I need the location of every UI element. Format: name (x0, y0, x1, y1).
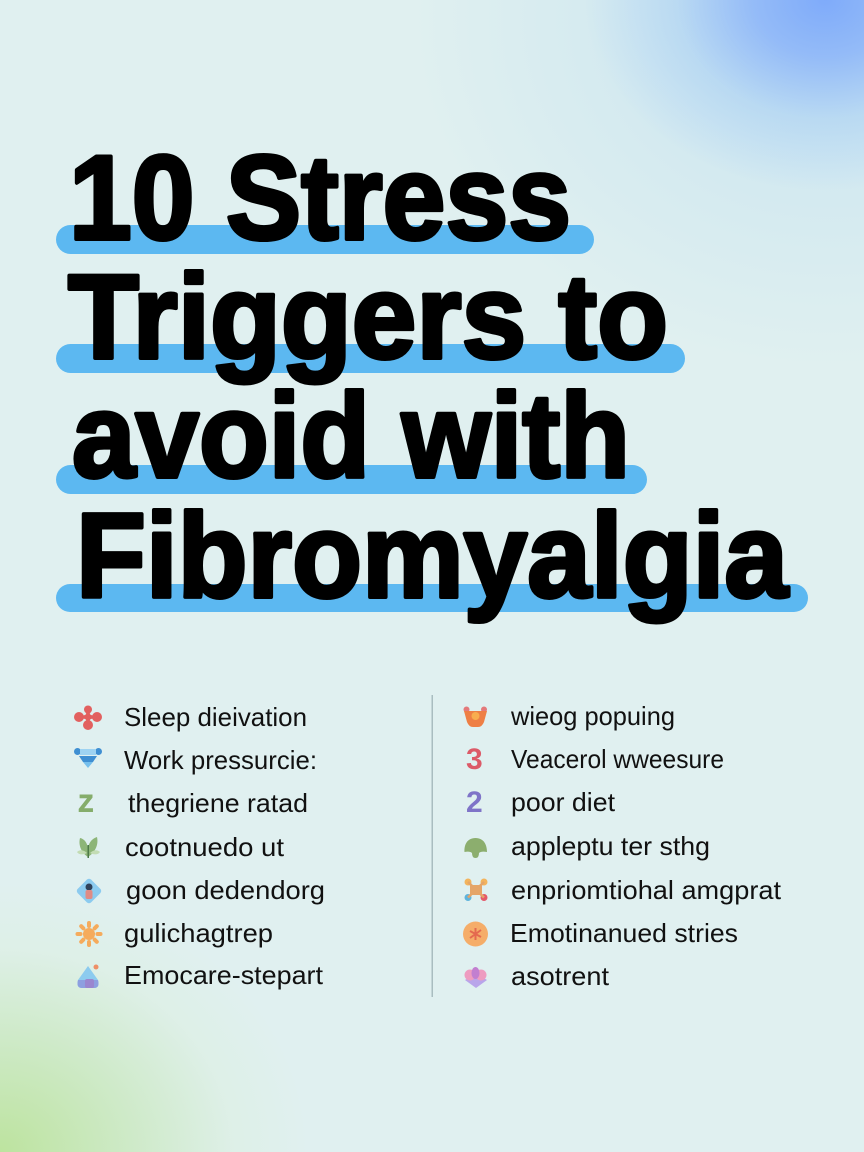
highlight bar: line 1 (56, 225, 594, 254)
label: gulichagtrep: gulichagtrep (124, 918, 273, 948)
title line 2: Triggers to (68, 250, 668, 384)
highlight bar: line 2 (56, 344, 685, 373)
icon: pink lotus (464, 967, 487, 988)
icon: purple number 2: 2 (466, 786, 483, 819)
icon: orange sun (76, 921, 102, 947)
icon: connected nodes (464, 878, 488, 901)
list: right column (463, 701, 782, 991)
icon: blue funnel (74, 748, 102, 768)
icon: orange circle with burst (463, 922, 488, 946)
icon: tent with dot (78, 964, 98, 988)
title line 1: 10 Stress (69, 131, 571, 265)
label: enpriomtiohal amgprat: enpriomtiohal amgprat (511, 875, 782, 905)
label: asotrent: asotrent (511, 961, 610, 991)
list: left column (74, 702, 325, 990)
label: poor diet: poor diet (511, 787, 616, 817)
icon: red number 3: 3 (466, 743, 483, 776)
icon: orange bowl (464, 706, 487, 727)
icon: red clover (74, 706, 102, 730)
title line 3: avoid with (72, 369, 630, 503)
label: Emotinanued stries: Emotinanued stries (510, 918, 738, 948)
label: appleptu ter sthg: appleptu ter sthg (511, 831, 710, 861)
label: Sleep dieivation: Sleep dieivation (124, 702, 307, 732)
label: goon dedendorg: goon dedendorg (126, 875, 325, 905)
highlight bar: line 3 (56, 465, 647, 494)
highlight bar: line 4 (56, 584, 808, 612)
icon: blue diamond with figure (76, 878, 102, 904)
title line 4: Fibromyalgia (76, 489, 789, 623)
icon: green sprout (77, 837, 100, 858)
label: Emocare-stepart: Emocare-stepart (124, 960, 324, 990)
title (56, 131, 808, 623)
label: Work pressurcie: Work pressurcie: (124, 745, 317, 775)
column divider (432, 695, 433, 997)
label: wieog popuing: wieog popuing (510, 701, 675, 731)
icon: green Z: Z (78, 790, 93, 818)
label: Veacerol wweesure: Veacerol wweesure (511, 744, 724, 774)
label: cootnuedo ut: cootnuedo ut (125, 832, 285, 862)
label: thegriene ratad: thegriene ratad (128, 788, 308, 818)
icon: green mushroom (464, 838, 487, 858)
